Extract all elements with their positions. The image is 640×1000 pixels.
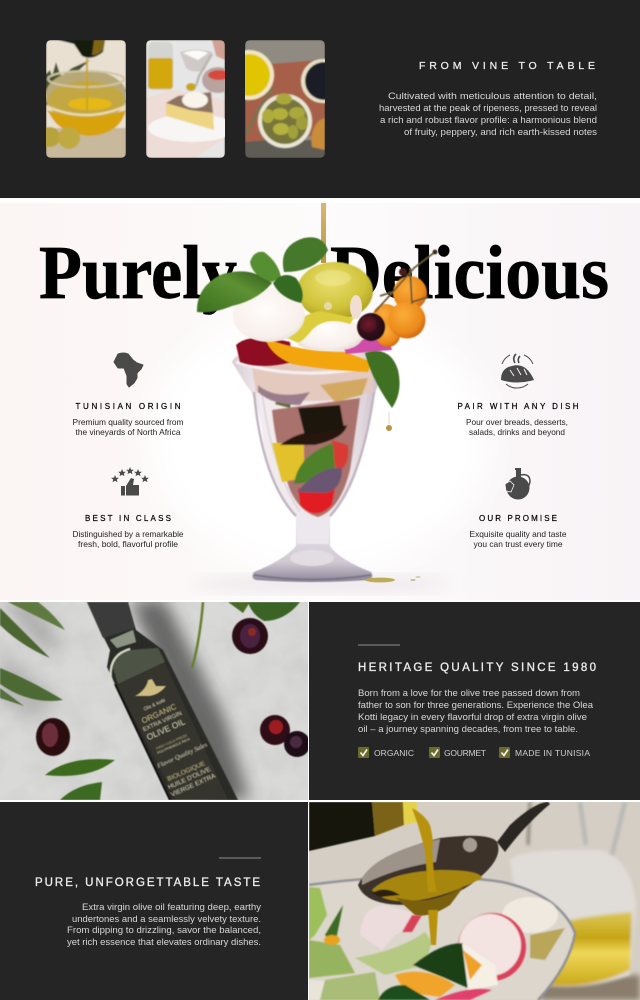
panel: heritage quality <box>309 602 640 800</box>
description <box>72 529 184 549</box>
title: Delicious <box>330 231 609 315</box>
bowl contents <box>236 362 374 517</box>
mozzarella center <box>298 314 362 350</box>
text: heritage description: oil – a journey spanning decades, from tree to table. <box>358 724 578 735</box>
icon: olive oil bottle <box>505 468 530 500</box>
jar in background <box>510 802 636 987</box>
red onion <box>343 339 392 354</box>
photo: olive oil bowl <box>40 40 127 158</box>
bottle label text: POLYPHENOLS RICH <box>157 737 191 755</box>
label logo <box>135 679 166 696</box>
text: taste description: Extra virgin olive oil featuring deep, earthy <box>82 902 261 913</box>
description: salads, drinks and beyond <box>469 427 565 437</box>
oil stream <box>412 808 438 945</box>
badge: organic <box>358 747 414 758</box>
panel: purely delicious hero <box>0 203 640 600</box>
bottle label text: HUILE D'OLIVE <box>167 766 212 791</box>
feature: pair with any dish <box>458 354 579 437</box>
description <box>72 417 184 437</box>
icon: africa <box>114 353 143 387</box>
text: from vine to table description: harvested at the peak of ripeness, pressed to reveal <box>379 103 597 114</box>
leaves <box>0 602 300 800</box>
red sauce <box>236 338 292 366</box>
olives <box>36 618 310 757</box>
bottle label text: VIERGE EXTRA <box>170 772 217 799</box>
title <box>39 231 609 315</box>
text: taste description <box>67 902 261 948</box>
oil drop <box>386 412 392 431</box>
yellow pepper <box>265 338 372 372</box>
feature: best in class <box>72 467 184 549</box>
text: taste description: yet rich essence that elevates ordinary dishes. <box>67 937 261 948</box>
bottle label text: BIOLOGIQUE <box>166 760 207 783</box>
text: heritage description: Kotti legacy in every flavorful drop of extra virgin olive <box>358 712 587 723</box>
text: heritage description: Born from a love for the olive tree passed down from <box>358 688 580 699</box>
description: you can trust every time <box>474 539 563 549</box>
description <box>470 529 567 549</box>
badge: gourmet <box>429 747 486 758</box>
yellow olive wedge <box>287 311 354 342</box>
bottle <box>87 602 238 800</box>
description: Distinguished by a remarkable <box>72 529 184 539</box>
glass bowl <box>232 350 382 522</box>
hanging basil leaf <box>365 351 400 408</box>
green olive <box>297 262 373 320</box>
illustration: sundae glass with caprese <box>197 203 437 582</box>
basil leaves <box>197 237 328 312</box>
badge: gourmet: GOURMET <box>444 748 486 758</box>
text: from vine to table description: a rich and robust flavor profile: a harmonious blend <box>380 115 597 126</box>
glass foot and stem <box>252 518 372 582</box>
oil puddle <box>365 576 420 582</box>
text: taste description: undertones and a seamlessly velvety texture. <box>72 914 261 925</box>
bottle label text: Flavor Quality Sales <box>155 741 209 770</box>
mozzarella left <box>233 288 305 342</box>
text: from vine to table description <box>379 91 597 138</box>
text: heritage description <box>358 688 594 735</box>
badge: organic: ORGANIC <box>374 748 414 758</box>
text: taste description: From dipping to drizzling, savor the balanced, <box>67 925 261 936</box>
bottle label text: EXTRA VIRGIN <box>142 711 183 733</box>
bottle <box>309 802 417 851</box>
heading: OUR PROMISE <box>479 514 557 523</box>
description <box>466 417 568 437</box>
description: Exquisite quality and taste <box>470 529 567 539</box>
heading: TUNISIAN ORIGIN <box>76 402 181 411</box>
text: heritage description: father to son for three generations. Experience the Olea <box>358 700 594 711</box>
feature: our promise <box>470 468 567 549</box>
text: from vine to table description: of fruity, peppery, and rich earth-kissed notes <box>404 127 597 138</box>
heading: BEST IN CLASS <box>85 514 171 523</box>
title: Purely <box>39 231 237 315</box>
photo: olive oil bottle on concrete <box>0 600 310 800</box>
photo: olives on wooden board <box>245 40 325 158</box>
badge: made in tunisia: MADE IN TUNISIA <box>515 748 590 758</box>
heading: from vine to table: FROM VINE TO TABLE <box>419 60 595 72</box>
feature: tunisian origin <box>72 353 184 437</box>
bottle label text: Ola & kotti <box>143 698 166 713</box>
description: fresh, bold, flavorful profile <box>78 539 178 549</box>
photo: olive oil poured over salad <box>309 802 640 1000</box>
bottle label text: ORGANIC <box>140 702 178 725</box>
bottle label text: FIRST COLD-PRESS <box>155 733 188 751</box>
oil stream <box>321 203 326 263</box>
badges <box>358 747 590 758</box>
text: from vine to table description: Cultivated with meticulous attention to detail, <box>388 91 597 102</box>
description: Premium quality sourced from <box>72 417 184 427</box>
photo: cake with olive oil <box>146 40 225 158</box>
spoon <box>358 802 550 916</box>
salad bowl <box>309 877 575 1000</box>
salad <box>309 887 526 1000</box>
description: the vineyards of North Africa <box>76 427 181 437</box>
tomatoes <box>372 250 437 347</box>
heading: PAIR WITH ANY DISH <box>458 402 579 411</box>
bottle label text: OLIVE OIL <box>145 716 187 742</box>
panel: from vine to table <box>0 0 640 198</box>
panel: pure, unforgettable taste <box>0 802 308 1000</box>
bottle shadow <box>130 600 250 800</box>
heading: pure, unforgettable taste: PURE, UNFORGETTABLE TASTE <box>35 877 260 889</box>
bottle label text <box>135 679 217 799</box>
icon: bread in circle <box>501 354 534 388</box>
heading: heritage quality: HERITAGE QUALITY SINCE 1980 <box>358 662 596 674</box>
dark berry <box>357 313 385 341</box>
icon: thumbs up with stars <box>111 467 149 496</box>
description: Pour over breads, desserts, <box>466 417 568 427</box>
